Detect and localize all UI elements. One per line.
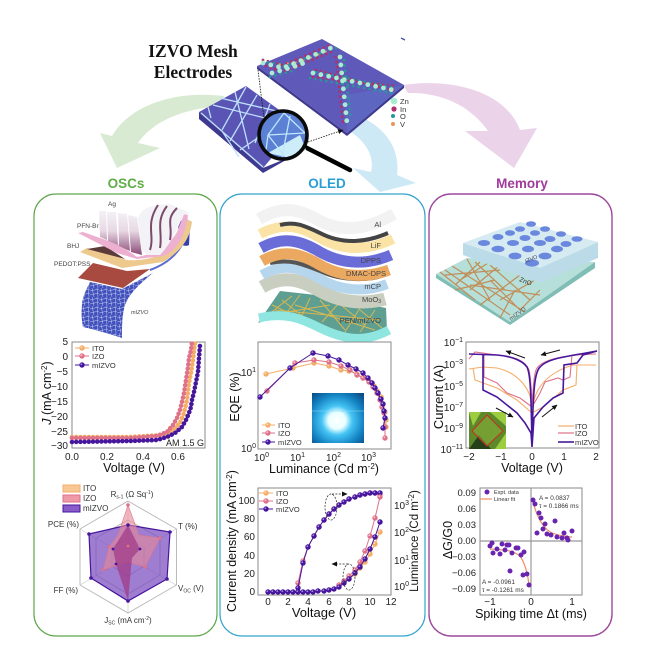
chart: spiking time: 0.06 <box>458 504 476 515</box>
chart: current density and luminance vs voltage: 10 <box>364 597 376 608</box>
chart: EQE vs luminance: 10 <box>361 453 372 464</box>
chart: EQE vs luminance: 10 <box>254 453 265 464</box>
chart: J-V curves: 0.2 <box>100 452 114 463</box>
OSC device stack <box>78 204 192 338</box>
chart: EQE vs luminance: 1 <box>301 452 305 459</box>
chart: radar: R <box>111 490 116 499</box>
chart: EQE vs luminance: IZO <box>278 429 291 438</box>
chart: radar: SC <box>108 620 116 626</box>
chart: spiking time: Expt. data <box>494 490 520 496</box>
chart: spiking time: −0.06 <box>452 568 476 579</box>
chart: I-V curves: IZO <box>575 429 588 438</box>
chart: J-V curves: ITO <box>92 344 105 353</box>
chart: I-V curves: −1 <box>455 337 463 344</box>
chart: radar: -2 <box>145 616 149 622</box>
chart: I-V curves: −1 <box>495 452 507 463</box>
panel: OSCs <box>34 194 217 636</box>
chart: J-V curves: 5 <box>62 337 68 348</box>
chart: I-V curves: Voltage (V) <box>501 461 563 475</box>
OLED layer labels: PEN/mIZVO <box>340 316 381 325</box>
chart: J-V curves: 0.6 <box>171 452 185 463</box>
chart: J-V curves: −20 <box>51 412 68 423</box>
chart: I-V curves: 1 <box>561 452 567 463</box>
chart: spiking time: 0 <box>528 597 534 608</box>
chart: J-V curves: −30 <box>51 441 68 452</box>
chart: current density and luminance vs voltage: mIZVO <box>276 505 300 514</box>
chart: radar: IZO <box>83 494 96 503</box>
chart: EQE vs luminance: 10 <box>241 444 252 455</box>
chart: current density and luminance vs voltage: 12 <box>385 597 397 608</box>
chart: current density and luminance vs voltage: 8 <box>346 597 352 608</box>
chart: spiking time: 1 <box>569 597 575 608</box>
OSC layer labels: Ag <box>108 201 116 208</box>
heading: Memory: Memory <box>496 176 548 191</box>
chart: J-V curves: ) <box>40 361 54 365</box>
chart: J-V curves: mIZVO <box>92 361 116 370</box>
chart: radar: T (%) <box>178 522 198 531</box>
OLED layer labels: LiF <box>371 241 381 250</box>
OSC layer labels: PEDOT:PSS <box>54 261 91 268</box>
atomic plate <box>257 38 405 136</box>
atom legend: Zn <box>400 97 409 106</box>
chart: radar: s-1 <box>116 494 124 500</box>
arrow: to Memory <box>403 83 537 168</box>
arrow: to OLED <box>345 116 416 192</box>
chart: spiking time: −1 <box>484 597 496 608</box>
chart: current density and luminance vs voltage: Voltage (V) <box>292 605 356 620</box>
panel: Memory <box>429 194 612 636</box>
chart: current density and luminance vs voltage: 4 <box>305 597 311 608</box>
chart: EQE vs luminance: 2 <box>337 452 341 459</box>
atom legend <box>391 97 409 129</box>
chart: radar: V <box>178 584 183 593</box>
panel: OLED <box>220 194 425 636</box>
chart: current density and luminance vs voltage: 10 <box>394 501 405 512</box>
heading: OLED: OLED <box>308 176 346 191</box>
chart: J-V curves: −25 <box>51 427 68 438</box>
chart: current density and luminance vs voltage: ITO <box>276 489 289 498</box>
chart: J-V curves: −15 <box>51 397 68 408</box>
OLED layer labels: Al <box>374 220 381 229</box>
chart: EQE vs luminance: 10 <box>326 453 337 464</box>
chart: current density and luminance vs voltage: 20 <box>244 569 255 580</box>
chart: radar: FF (%) <box>54 586 78 595</box>
chart: current density and luminance vs voltage: 1 <box>405 555 409 562</box>
chart: I-V curves: mIZVO <box>575 438 599 447</box>
chart: J-V curves: 0.4 <box>136 452 150 463</box>
chart: EQE vs luminance: 0 <box>252 443 256 450</box>
chart: EQE vs luminance <box>228 342 391 476</box>
chart: current density and luminance vs voltage: 0 <box>265 597 271 608</box>
chart: I-V curves: 10 <box>444 403 455 414</box>
memory device stack: IZVO <box>525 254 539 265</box>
OLED layer labels <box>340 220 386 325</box>
chart: I-V curves: −3 <box>455 359 463 366</box>
chart: current density and luminance vs voltage: 3 <box>405 500 409 507</box>
chart: radar <box>48 484 204 626</box>
chart: J-V curves: 0 <box>62 352 68 363</box>
chart: spiking time: Spiking time Δt (ms) <box>475 607 587 621</box>
OLED layer labels: mCP <box>364 282 381 291</box>
chart: current density and luminance vs voltage: 2 <box>405 527 409 534</box>
chart: radar: OC <box>183 588 191 594</box>
chart: EQE vs luminance: -2 <box>368 462 375 471</box>
chart: spiking time: τ = -0.1261 ms <box>482 587 524 594</box>
dashed zoom lines <box>258 70 343 142</box>
chart: current density and luminance vs voltage: IZO <box>276 497 289 506</box>
chart: radar: (mA cm <box>115 616 145 625</box>
chart: current density and luminance vs voltage: ) <box>409 490 421 494</box>
chart: I-V curves: 2 <box>593 452 599 463</box>
chart: radar: ) <box>149 616 152 625</box>
chart: J-V curves: IZO <box>92 352 105 361</box>
chart: spiking time: −0.03 <box>452 552 476 563</box>
chart: J-V curves: AM 1.5 G <box>166 438 204 448</box>
chart: J-V curves: −10 <box>51 382 68 393</box>
chart: current density and luminance vs voltage: 60 <box>244 532 255 543</box>
chart: current density and luminance vs voltage: 6 <box>326 597 332 608</box>
chart: I-V curves: Current (A) <box>431 365 446 429</box>
chart: current density and luminance vs voltage: Current density (mA cm <box>225 481 239 612</box>
OLED layer labels: 3 <box>378 299 381 305</box>
chart: EQE vs luminance: ITO <box>278 421 291 430</box>
chart: spiking time: −0.09 <box>452 584 476 595</box>
chart: EQE vs luminance: Luminance (Cd m <box>269 462 368 476</box>
atom legend: O <box>400 112 406 121</box>
chart: spiking time: 0.09 <box>458 488 476 499</box>
chart: spiking time: 0.03 <box>458 520 476 531</box>
memory device stack <box>436 221 598 325</box>
chart: EQE vs luminance: ) <box>375 462 379 476</box>
chart: current density and luminance vs voltage: 80 <box>244 514 255 525</box>
chart: spiking time: A = 0.0837 <box>539 495 570 502</box>
chart: radar: (Ω Sq <box>123 490 146 499</box>
chart: current density and luminance vs voltage: 10 <box>394 556 405 567</box>
chart: current density and luminance vs voltage: -2 <box>225 474 234 481</box>
heading: OSCs: OSCs <box>108 176 144 191</box>
title: IZVO Mesh <box>148 41 238 61</box>
chart: J-V curves: 0.0 <box>65 452 79 463</box>
chart: radar: ITO <box>83 484 96 493</box>
chart: current density and luminance vs voltage: ) <box>225 470 239 474</box>
chart: current density and luminance vs voltage: Luminance (Cd m <box>409 501 421 592</box>
chart: I-V curves: −9 <box>455 423 463 430</box>
chart: spiking time: τ = 0.1866 ms <box>539 503 579 510</box>
mesh electrode plate <box>199 86 300 173</box>
chart: spiking time: ΔG/G0 <box>441 521 455 559</box>
chart: spiking time: 0.00 <box>458 536 476 547</box>
OSC layer labels: BHJ <box>67 243 79 250</box>
inset: emission photo <box>312 393 364 443</box>
chart: current density and luminance vs voltage: 0 <box>249 587 255 598</box>
chart: EQE vs luminance: 10 <box>241 368 252 379</box>
chart: radar: PCE (%) <box>48 520 79 529</box>
chart: I-V curves: −7 <box>455 402 463 409</box>
chart: EQE vs luminance: mIZVO <box>278 438 302 447</box>
chart: radar: (V) <box>191 584 204 593</box>
title <box>148 41 238 82</box>
chart: radar: J <box>104 616 108 625</box>
chart: I-V curves: −5 <box>455 381 463 388</box>
chart: current density and luminance vs voltage: -2 <box>407 493 416 501</box>
chart: spiking time <box>441 488 587 621</box>
chart: current density and luminance vs voltage: 100 <box>238 496 255 507</box>
chart: J-V curves: Voltage (V) <box>103 461 165 475</box>
OSC layer labels: PFN-Br <box>77 223 100 230</box>
chart: J-V curves: J (mA cm <box>40 373 54 425</box>
chart: I-V curves: 10 <box>444 382 455 393</box>
chart: current density and luminance vs voltage: 2 <box>285 597 291 608</box>
atom legend: V <box>400 120 405 129</box>
chart: EQE vs luminance: 3 <box>372 452 376 459</box>
OLED layer labels: DPPS <box>361 256 381 265</box>
chart: EQE vs luminance: 0 <box>265 452 269 459</box>
chart: current density and luminance vs voltage: 10 <box>394 528 405 539</box>
atom legend: In <box>400 105 406 114</box>
title: Electrodes <box>154 62 232 82</box>
chart: current density and luminance vs voltage: 10 <box>394 582 405 593</box>
memory device stack: mIZVO <box>509 306 528 323</box>
chart: radar: ) <box>151 490 154 499</box>
chart: I-V curves: 10 <box>444 338 455 349</box>
chart: J-V curves: −5 <box>57 367 68 378</box>
chart: I-V curves: −2 <box>463 452 475 463</box>
chart: spiking time: Linear fit <box>494 497 516 503</box>
memory device stack: ZnO <box>518 276 533 288</box>
chart: radar: mIZVO <box>83 504 108 513</box>
chart: I-V curves: −11 <box>452 444 463 451</box>
OLED device stack <box>258 210 394 338</box>
chart: EQE vs luminance: 10 <box>290 453 301 464</box>
chart: I-V curves: 0 <box>529 452 535 463</box>
chart: I-V curves: ITO <box>575 422 588 431</box>
chart: I-V curves: 10 <box>444 424 455 435</box>
icon: magnifier <box>259 111 350 170</box>
inset: leaf photo <box>469 412 506 449</box>
chart: J-V curves <box>40 337 205 475</box>
chart: radar: -1 <box>146 490 151 496</box>
chart: I-V curves: 10 <box>444 360 455 371</box>
chart: current density and luminance vs voltage: 40 <box>244 551 255 562</box>
OLED layer labels: DMAC-DPS <box>346 269 386 278</box>
OSC layer labels <box>54 201 149 316</box>
chart: current density and luminance vs voltage: 0 <box>405 581 409 588</box>
OLED layer labels: MoO <box>362 295 378 304</box>
chart: current density and luminance vs voltage <box>225 470 421 620</box>
chart: EQE vs luminance: EQE (%) <box>228 372 242 422</box>
chart: I-V curves: 10 <box>441 445 452 456</box>
chart: I-V curves <box>431 337 599 475</box>
chart: J-V curves: -2 <box>40 365 49 373</box>
chart: spiking time: A = -0.0961 <box>482 579 515 586</box>
chart: EQE vs luminance: 1 <box>252 367 256 374</box>
arrow: to OSCs <box>100 95 224 168</box>
OSC layer labels: mIZVO <box>131 310 149 316</box>
